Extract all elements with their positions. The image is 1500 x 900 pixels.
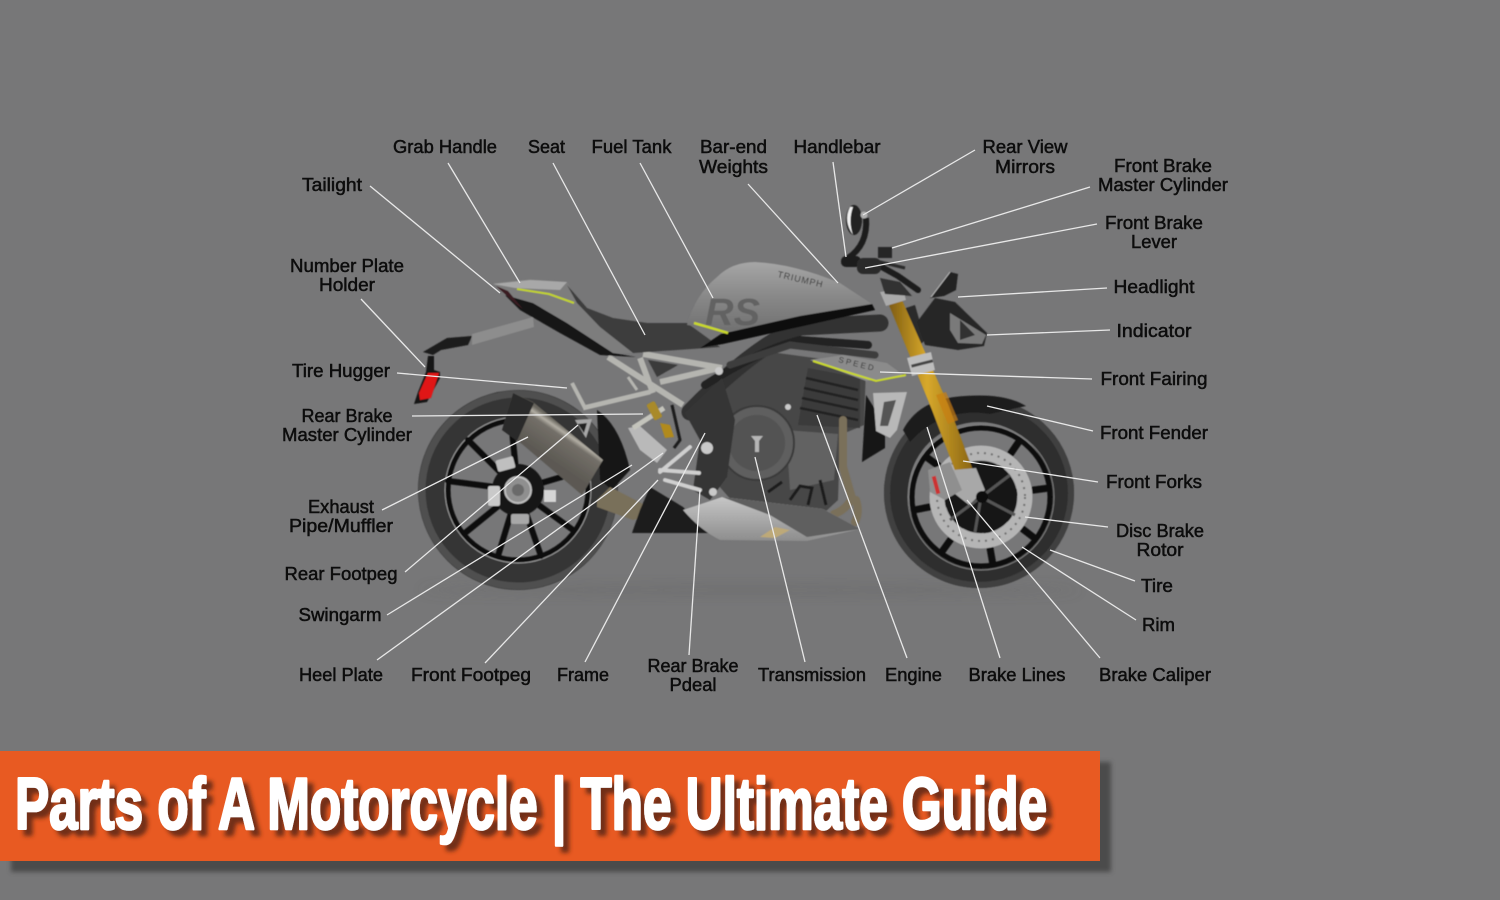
- label: Front Brake Lever: Front Brake: [1105, 213, 1203, 233]
- front fairing: [810, 355, 906, 381]
- clutch cover with logo: [720, 406, 794, 480]
- front forks: [880, 289, 988, 505]
- label: Bar-end Weights: [699, 137, 768, 177]
- rear wheel: [422, 394, 614, 586]
- exhaust header pipes: [834, 420, 858, 522]
- label: Bar-end Weights: Bar-end: [700, 137, 767, 157]
- title banner: [0, 751, 1100, 861]
- rear subframe trellis: [572, 354, 722, 408]
- yellow accent: [694, 323, 728, 333]
- title text: Parts of A Motorcycle | The Ultimate Guide: [15, 764, 1047, 845]
- label: Swingarm: Swingarm: [298, 605, 382, 625]
- swingarm and exhaust link: [597, 410, 667, 520]
- ground shadow: [420, 585, 1080, 595]
- label: Front Fender: Front Fender: [1100, 423, 1208, 443]
- fuel tank: [687, 262, 875, 348]
- frame main tubes: [690, 323, 880, 412]
- motorcycle illustration: [414, 205, 1080, 595]
- label: Frame: Frame: [557, 665, 609, 685]
- label: Rear Brake Master Cylinder: Master Cylinder: [282, 425, 412, 445]
- label: Rear Brake Master Cylinder: Rear Brake: [302, 406, 392, 426]
- label: Number Plate Holder: [290, 256, 404, 295]
- label: Front Brake Lever: [1105, 213, 1203, 252]
- label: Front Brake Lever: Lever: [1131, 232, 1177, 252]
- rear underseat dark triangle: [648, 360, 678, 377]
- frame bolts: [701, 367, 791, 496]
- label: Brake Lines: Brake Lines: [968, 665, 1066, 685]
- brand: TRIUMPH: [777, 269, 824, 289]
- seat: [567, 285, 720, 353]
- label: Rear Footpeg: Rear Footpeg: [284, 564, 398, 584]
- label: Indicator: Indicator: [1116, 321, 1192, 341]
- mirror: [846, 205, 862, 235]
- label: Rear Brake Pdeal: [648, 656, 738, 695]
- label: Grab Handle: Grab Handle: [393, 137, 497, 157]
- label: Rear Brake Master Cylinder: [282, 406, 412, 445]
- label: Rear View Mirrors: [982, 137, 1069, 177]
- label: Front Brake Master Cylinder: Front Brake: [1114, 156, 1212, 176]
- brake caliper: [928, 462, 962, 500]
- label: Engine: Engine: [885, 665, 942, 685]
- label: Bar-end Weights: Weights: [699, 157, 768, 177]
- label: Tire: Tire: [1141, 576, 1173, 596]
- front wheel: [887, 401, 1071, 585]
- leader lines: [361, 150, 1136, 663]
- label: Fuel Tank: Fuel Tank: [592, 137, 673, 157]
- front fender: [903, 395, 1026, 442]
- label: Disc Brake Rotor: Rotor: [1136, 540, 1184, 560]
- label: Seat: Seat: [528, 137, 565, 157]
- label: Exhaust Pipe/Muffler: [289, 497, 393, 536]
- label: Tailight: Tailight: [302, 175, 362, 195]
- label: Tire Hugger: Tire Hugger: [292, 361, 390, 381]
- label: Exhaust Pipe/Muffler: Exhaust: [308, 497, 374, 517]
- engine: [705, 352, 866, 512]
- label: Front Footpeg: Front Footpeg: [411, 665, 531, 685]
- disc brake rotor: [937, 453, 1025, 541]
- label: Number Plate Holder: Number Plate: [290, 256, 404, 276]
- label: Disc Brake Rotor: Disc Brake: [1116, 521, 1204, 541]
- label: Exhaust Pipe/Muffler: Pipe/Muffler: [289, 516, 393, 536]
- label: Brake Caliper: Brake Caliper: [1099, 665, 1211, 685]
- red plate reflector: [419, 373, 439, 400]
- label: Rear View Mirrors: Rear View: [982, 137, 1069, 157]
- muffler: [502, 393, 603, 495]
- label: Rear View Mirrors: Mirrors: [995, 157, 1055, 177]
- number plate holder: [414, 317, 534, 404]
- RS logo: RS: [705, 292, 760, 334]
- label: Rear Brake Pdeal: Pdeal: [670, 675, 716, 695]
- label: Disc Brake Rotor: [1116, 521, 1204, 560]
- label: Handlebar: Handlebar: [794, 137, 880, 157]
- tail section: [493, 279, 636, 357]
- label: Front Fairing: Front Fairing: [1100, 369, 1208, 389]
- label: Rim: Rim: [1142, 615, 1175, 635]
- label: Rear Brake Pdeal: Rear Brake: [648, 656, 738, 676]
- label: Front Brake Master Cylinder: Master Cylinder: [1098, 175, 1228, 195]
- label: Heel Plate: Heel Plate: [299, 665, 383, 685]
- handlebar and controls: [841, 205, 918, 296]
- banner background: [0, 751, 1100, 861]
- label: Front Forks: Front Forks: [1106, 472, 1202, 492]
- rear shock absorber: [633, 401, 680, 448]
- label: Transmission: Transmission: [758, 665, 866, 685]
- lower engine pan: [632, 487, 860, 541]
- part labels: [282, 137, 1228, 695]
- front fairing: SPEED: [838, 355, 875, 373]
- upper cowl and headlight: [900, 272, 987, 350]
- label: Number Plate Holder: Holder: [319, 275, 375, 295]
- radiator and cover: [862, 392, 907, 462]
- frame swing plate: [685, 378, 735, 500]
- footpeg hanger and pegs: [660, 447, 700, 490]
- label: Front Brake Master Cylinder: [1098, 156, 1228, 195]
- label: Headlight: Headlight: [1114, 277, 1194, 297]
